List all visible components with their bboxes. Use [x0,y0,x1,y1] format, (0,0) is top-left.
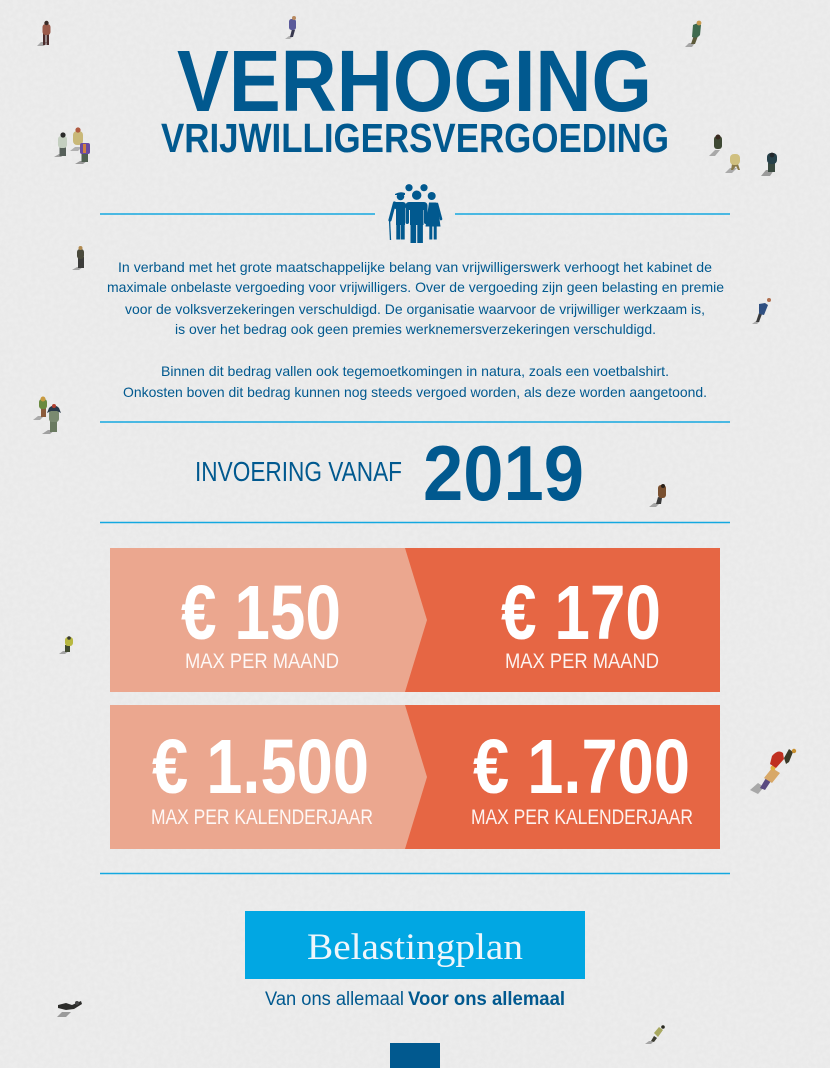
panel: yearly maximum: € 1.700 [473,724,690,810]
start year: 2019 [423,429,584,517]
panel: monthly maximum: € 170 [501,570,661,656]
intro text: voor de volksverzekeringen verschuldigd. De organisatie waarvoor de vrijwilliger werkzaam is, [125,301,705,317]
start year: INVOERING VANAF [195,456,402,487]
people: bottom right [645,1025,665,1044]
intro text: Onkosten boven dit bedrag kunnen nog steeds vergoed worden, als deze worden aangetoond. [123,384,707,400]
banner: Belastingplan [245,911,585,979]
people: top left [37,21,50,46]
panel: monthly maximum: € 150 [181,570,341,656]
people: centre right [649,484,666,507]
people: bottom left [57,1001,82,1017]
panel: yearly maximum [110,705,720,849]
slogan [265,989,565,1010]
intro text: is over het bedrag ook geen premies werknemersverzekeringen verschuldigd. [175,321,656,337]
title [161,33,669,161]
title: VERHOGING [177,33,652,130]
panel: yearly maximum: MAX PER KALENDERJAAR [471,805,693,829]
start year [195,429,584,517]
people: left lower [59,636,73,654]
people: right middle [752,298,771,324]
panel: monthly maximum: MAX PER MAAND [185,649,339,673]
panel: yearly maximum: MAX PER KALENDERJAAR [151,805,373,829]
people: left pair [33,396,61,434]
panel: yearly maximum: € 1.500 [152,724,369,810]
people: right group [709,134,777,176]
icon: group of volunteers [390,184,441,243]
people: right group of three [750,749,796,794]
panel: monthly maximum [110,548,720,692]
intro text: In verband met het grote maatschappelijke belang van vrijwilligerswerk verhoogt het kabinet de [118,259,712,275]
people: top right [685,21,701,47]
people: top centre [285,16,296,39]
intro text: maximale onbelaste vergoeding voor vrijwilligers. Over de vergoeding zijn geen belasting en premie [107,279,724,295]
panel: monthly maximum: MAX PER MAAND [505,649,659,673]
intro text: Binnen dit bedrag vallen ook tegemoetkomingen in natura, zoals een voetbalshirt. [161,363,669,379]
bottom tab [390,1043,440,1068]
slogan: Van ons allemaal [265,989,404,1010]
banner: Belastingplan: Belastingplan [307,927,523,968]
title: VRIJWILLIGERSVERGOEDING [161,115,669,161]
slogan: Voor ons allemaal [408,989,565,1010]
people: left middle [72,246,84,270]
intro text [107,259,724,400]
people: left group [54,127,90,164]
